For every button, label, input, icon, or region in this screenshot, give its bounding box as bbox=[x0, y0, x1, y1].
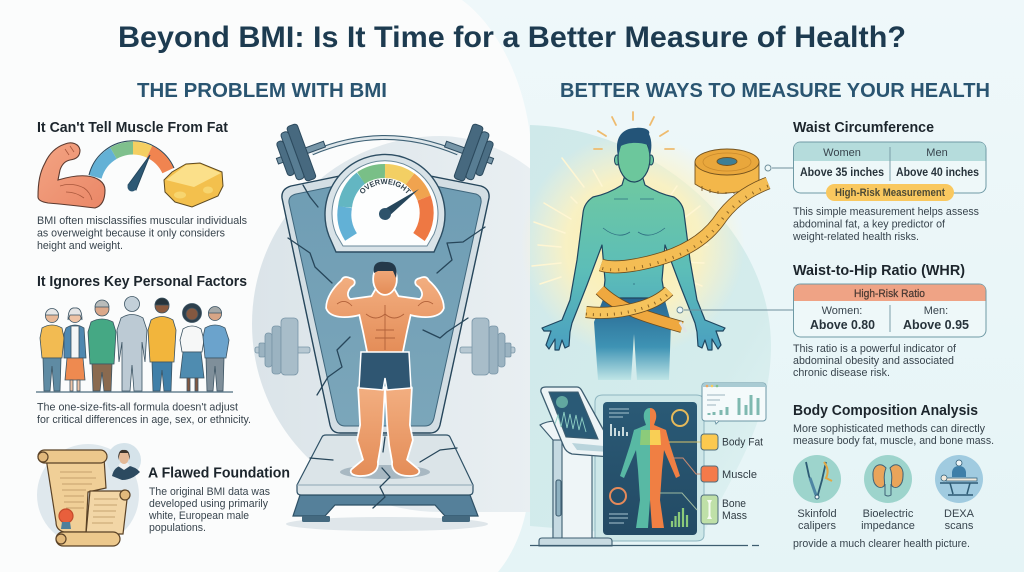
legend: muscle bbox=[701, 466, 757, 482]
icon: skinfold calipers bbox=[793, 455, 841, 503]
scale base bbox=[293, 435, 478, 522]
background: disc behind scale bbox=[252, 136, 532, 512]
icon: gauge arc bbox=[89, 141, 174, 192]
panel: waist-to-hip ratio bbox=[793, 263, 986, 379]
table: WHR thresholds: Women: bbox=[822, 305, 862, 317]
legend: body fat bbox=[701, 434, 763, 450]
ground line bbox=[36, 391, 233, 393]
side dumbbell left bbox=[255, 318, 310, 375]
text: closing line: provide a much clearer health picture. bbox=[793, 538, 970, 550]
text: flawed foundation description bbox=[148, 486, 270, 534]
body scan screen bbox=[603, 402, 697, 535]
table: WHR thresholds: Above 0.95 bbox=[903, 317, 969, 332]
leader lines bbox=[660, 442, 701, 510]
panel: waist circumference bbox=[792, 120, 986, 243]
kiosk stand bbox=[539, 387, 615, 546]
labels: methods: DEXA bbox=[944, 508, 975, 520]
gauge label: OVERWEIGHT bbox=[360, 178, 412, 194]
labels: methods: impedance bbox=[861, 520, 915, 532]
icon: main scroll bbox=[38, 450, 130, 546]
background: right panel bbox=[462, 0, 1024, 572]
text: body composition description bbox=[793, 423, 994, 447]
badge: high-risk measurement bbox=[826, 184, 954, 201]
body glow bbox=[521, 133, 745, 357]
heading: personal factors: It Ignores Key Personal Factors bbox=[37, 274, 247, 290]
text: flawed foundation description: The original BMI data was bbox=[149, 486, 270, 498]
text: body composition description: More sophisticated methods can directly bbox=[793, 423, 985, 435]
heading: the problem with BMI: THE PROBLEM WITH BMI bbox=[137, 80, 387, 102]
text: WHR description bbox=[793, 343, 957, 379]
heading: flawed foundation: A Flawed Foundation bbox=[148, 466, 290, 482]
heading: WHR: Waist-to-Hip Ratio (WHR) bbox=[793, 263, 965, 279]
person 5 bbox=[148, 298, 176, 391]
muscular man bbox=[327, 262, 443, 475]
connector: waist to hip bbox=[677, 307, 793, 313]
text: flawed foundation description: populations. bbox=[149, 522, 206, 534]
legend: bone mass: Bone bbox=[722, 498, 746, 510]
scan figure bbox=[620, 408, 680, 528]
text: muscle description: as overweight because it only considers bbox=[37, 228, 225, 240]
head rays bbox=[594, 112, 674, 149]
text: body composition description: measure body fat, muscle, and bone mass. bbox=[793, 435, 994, 447]
text: flawed foundation description: developed using primarily bbox=[149, 498, 268, 510]
scale cracks bbox=[288, 185, 485, 395]
gauge dial bbox=[324, 154, 446, 253]
heading: body composition: Body Composition Analysis bbox=[793, 403, 978, 419]
illustration: cracked scale with muscular man bbox=[254, 124, 516, 531]
labels: methods: calipers bbox=[798, 520, 836, 532]
ground line bbox=[530, 544, 759, 546]
glow rays bbox=[532, 158, 708, 286]
table: waist thresholds bbox=[794, 142, 986, 201]
text: waist description bbox=[792, 206, 979, 243]
text: personal factors description: The one-size-fits-all formula doesn't adjust bbox=[37, 402, 238, 414]
text: muscle description: BMI often misclassifies muscular individuals bbox=[37, 215, 247, 227]
person 6 bbox=[180, 304, 204, 391]
person 2 bbox=[64, 308, 86, 391]
icon: fat block bbox=[164, 163, 223, 207]
text: muscle description bbox=[37, 215, 247, 252]
figure chest lines bbox=[603, 199, 665, 285]
tape lower straps bbox=[586, 290, 686, 332]
panel: personal factors bbox=[36, 274, 251, 426]
scale back plate bbox=[282, 176, 489, 433]
table: waist thresholds: Women bbox=[823, 147, 861, 159]
popup chart bbox=[702, 383, 766, 424]
text: waist description: abdominal fat, a key predictor of bbox=[793, 218, 946, 230]
icon: flexed arm bbox=[38, 143, 105, 208]
legend: body fat: Body Fat bbox=[722, 436, 763, 448]
text: muscle description: height and weight. bbox=[37, 240, 123, 252]
table: WHR thresholds bbox=[794, 284, 986, 337]
background: teal disc behind figure bbox=[530, 125, 771, 540]
legend: bone mass bbox=[701, 495, 747, 524]
screen backing bbox=[595, 395, 704, 541]
gauge needle bbox=[383, 189, 419, 217]
tape roll bbox=[695, 149, 759, 194]
figure pants bbox=[594, 297, 671, 380]
text: personal factors description: for critical differences in age, sex, or ethnicity. bbox=[37, 414, 251, 426]
figure head bbox=[614, 128, 654, 182]
person 3 bbox=[88, 300, 116, 391]
text: WHR description: abdominal obesity and associated bbox=[793, 355, 954, 367]
person 1 bbox=[40, 309, 64, 391]
text: WHR description: This ratio is a powerful indicator of bbox=[793, 343, 957, 355]
text: waist description: weight-related health risks. bbox=[792, 231, 919, 243]
table: waist thresholds: Above 35 inches bbox=[800, 167, 884, 179]
heading: muscle from fat: It Can't Tell Muscle From Fat bbox=[37, 120, 228, 136]
illustration: body with measuring tape bbox=[521, 112, 768, 380]
heading: waist circumference: Waist Circumference bbox=[793, 120, 934, 136]
heading: better ways: BETTER WAYS TO MEASURE YOUR HEALTH bbox=[560, 80, 990, 102]
labels: methods: scans bbox=[945, 520, 974, 532]
labels: methods bbox=[797, 508, 975, 532]
scale shadow bbox=[286, 517, 488, 531]
labels: methods: Skinfold bbox=[797, 508, 837, 520]
title: Beyond BMI: Is It Time for a Better Measure of Health? bbox=[118, 21, 906, 54]
panel: body composition analysis bbox=[793, 403, 994, 550]
panel: flawed foundation bbox=[37, 443, 290, 546]
labels: methods: Bioelectric bbox=[863, 508, 914, 520]
top barbell bbox=[268, 117, 502, 188]
connector: waist bbox=[765, 165, 793, 171]
text: personal factors description bbox=[37, 402, 251, 426]
legend: muscle: Muscle bbox=[722, 469, 757, 481]
legend: bone mass: Mass bbox=[722, 510, 747, 522]
tape upper strap bbox=[601, 183, 768, 270]
text: WHR description: chronic disease risk. bbox=[793, 367, 890, 379]
figure body bbox=[542, 175, 725, 350]
table: waist thresholds: Men bbox=[926, 147, 948, 159]
panel: muscle vs fat bbox=[37, 120, 247, 252]
text: flawed foundation description: white, European male bbox=[148, 510, 249, 522]
person 4 bbox=[117, 296, 147, 391]
table: waist thresholds: Above 40 inches bbox=[896, 167, 979, 179]
person 7 bbox=[203, 306, 229, 391]
side dumbbell right bbox=[460, 318, 515, 375]
table: WHR thresholds: Men: bbox=[924, 305, 948, 317]
scan screen charts bbox=[609, 409, 688, 527]
illustration: group of people bbox=[36, 296, 233, 392]
icon: bioelectric kidneys bbox=[864, 455, 912, 503]
icon: portrait bbox=[107, 443, 141, 480]
badge: high-risk measurement: High-Risk Measurement bbox=[835, 187, 945, 199]
icon: scroll backdrop bbox=[37, 444, 139, 546]
icon: DEXA scan bbox=[935, 455, 983, 503]
illustration: body composition kiosk bbox=[530, 383, 766, 546]
table: WHR thresholds: High-Risk Ratio bbox=[854, 288, 925, 300]
table: WHR thresholds: Above 0.80 bbox=[810, 317, 875, 332]
text: waist description: This simple measurement helps assess bbox=[793, 206, 979, 218]
